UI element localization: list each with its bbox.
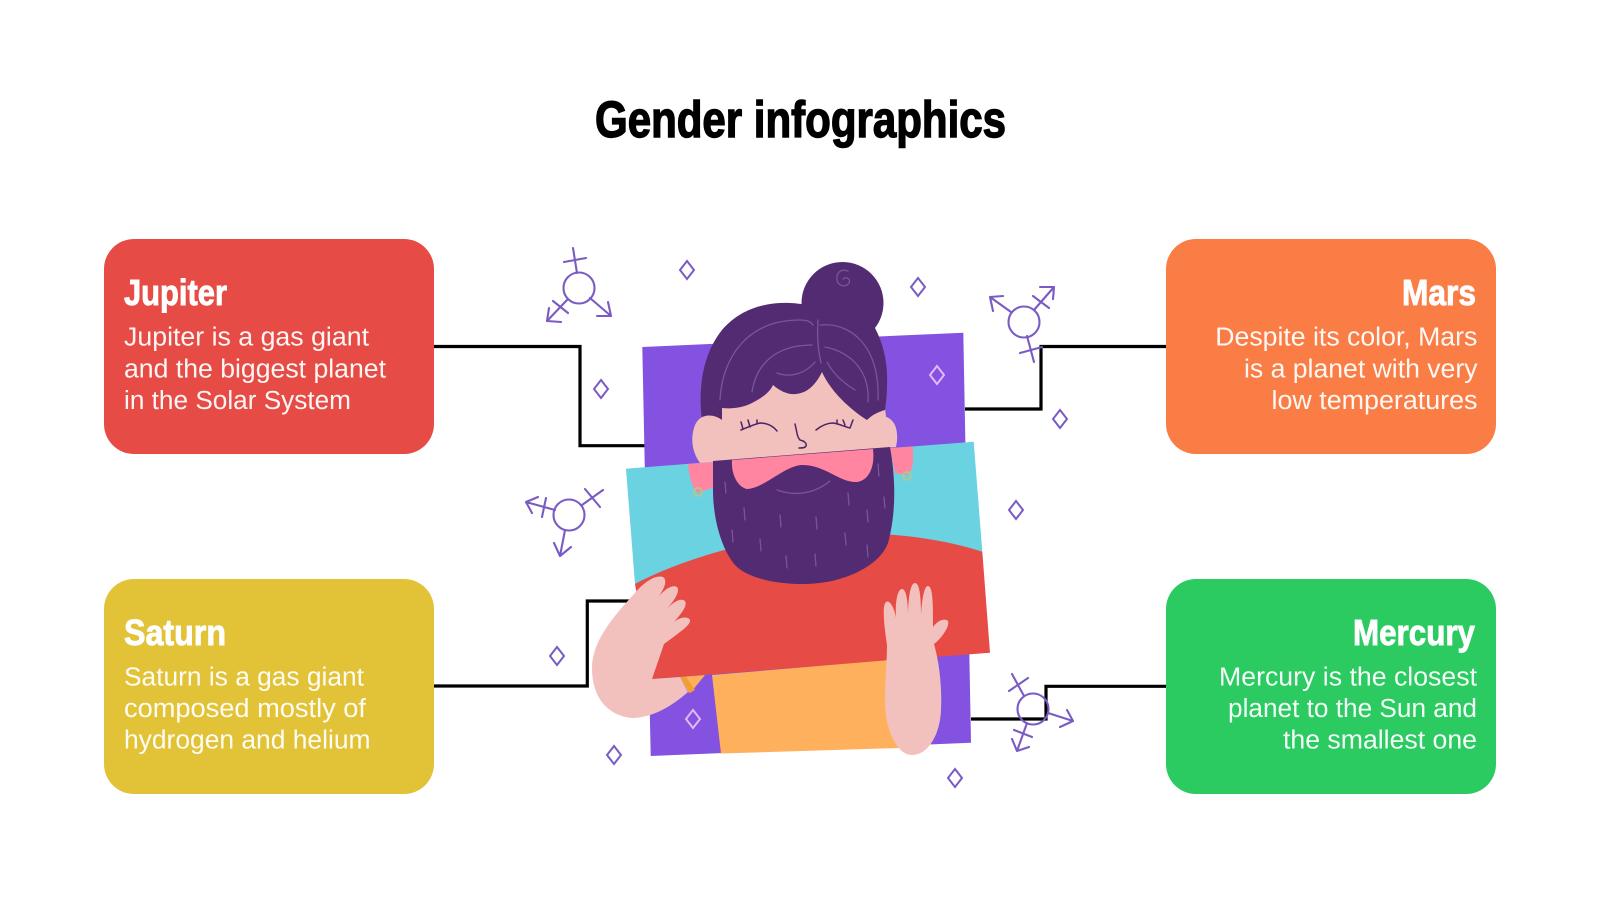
pink mouth band <box>732 449 873 489</box>
icon: gender symbol left middle <box>526 489 603 556</box>
orange stripe <box>680 677 695 693</box>
hair bun <box>802 262 884 344</box>
connector: Jupiter <box>434 346 645 446</box>
card background <box>104 239 434 454</box>
body text: the smallest one <box>1283 727 1477 755</box>
beard texture <box>725 464 885 568</box>
card background <box>1166 239 1496 454</box>
connector: Saturn <box>434 601 630 686</box>
body text: planet to the Sun and <box>1228 695 1477 723</box>
body text <box>1215 324 1478 415</box>
body text: composed mostly of <box>124 695 367 723</box>
body text: hydrogen and helium <box>124 727 370 755</box>
beard <box>713 447 894 584</box>
teal shirt collar panel <box>626 442 982 584</box>
connector: Mercury <box>971 686 1166 719</box>
purple background panel <box>642 333 971 756</box>
heading: Mars <box>1402 272 1476 313</box>
body text <box>1219 664 1477 755</box>
illustration: bearded person with hair bun <box>592 262 990 756</box>
panel: Saturn <box>104 579 434 794</box>
left arm and hand <box>592 576 690 718</box>
body text: and the biggest planet <box>124 355 386 383</box>
body text: Jupiter is a gas giant <box>124 324 369 352</box>
icon: gender symbol lower right <box>1009 674 1073 751</box>
yellow shirt hem <box>712 660 900 754</box>
body text: Despite its color, Mars <box>1215 324 1477 352</box>
body text: in the Solar System <box>124 387 351 415</box>
body text: low temperatures <box>1272 387 1478 415</box>
body text: Saturn is a gas giant <box>124 664 364 692</box>
body text: Mercury is the closest <box>1219 664 1477 692</box>
title: Gender infographics <box>595 91 1006 148</box>
decorative diamonds <box>550 261 1067 787</box>
heading: Mercury <box>1353 612 1475 653</box>
icon: gender symbol top right <box>990 287 1054 362</box>
right ear lobe with earring <box>890 446 913 480</box>
body text <box>124 324 386 415</box>
card background <box>1166 579 1496 794</box>
heading: Saturn <box>124 612 226 653</box>
left ear lobe with earring <box>688 462 714 496</box>
hair strands <box>720 320 878 402</box>
facial features <box>741 420 853 448</box>
body text <box>124 664 370 755</box>
icon: gender symbol top left <box>547 248 611 322</box>
connector: Mars <box>965 346 1166 409</box>
card background <box>104 579 434 794</box>
right ear <box>867 416 897 449</box>
heading: Jupiter <box>124 272 227 313</box>
panel: Mars <box>1166 239 1496 454</box>
hair <box>701 303 887 420</box>
panel: Jupiter <box>104 239 434 454</box>
moustache line <box>777 481 830 493</box>
left ear <box>692 416 725 463</box>
orange sliver <box>680 675 705 693</box>
body text: is a planet with very <box>1244 355 1478 383</box>
panel: Mercury <box>1166 579 1496 794</box>
red shirt <box>635 533 990 679</box>
right arm and hand <box>884 583 948 755</box>
face upper half <box>705 370 890 463</box>
